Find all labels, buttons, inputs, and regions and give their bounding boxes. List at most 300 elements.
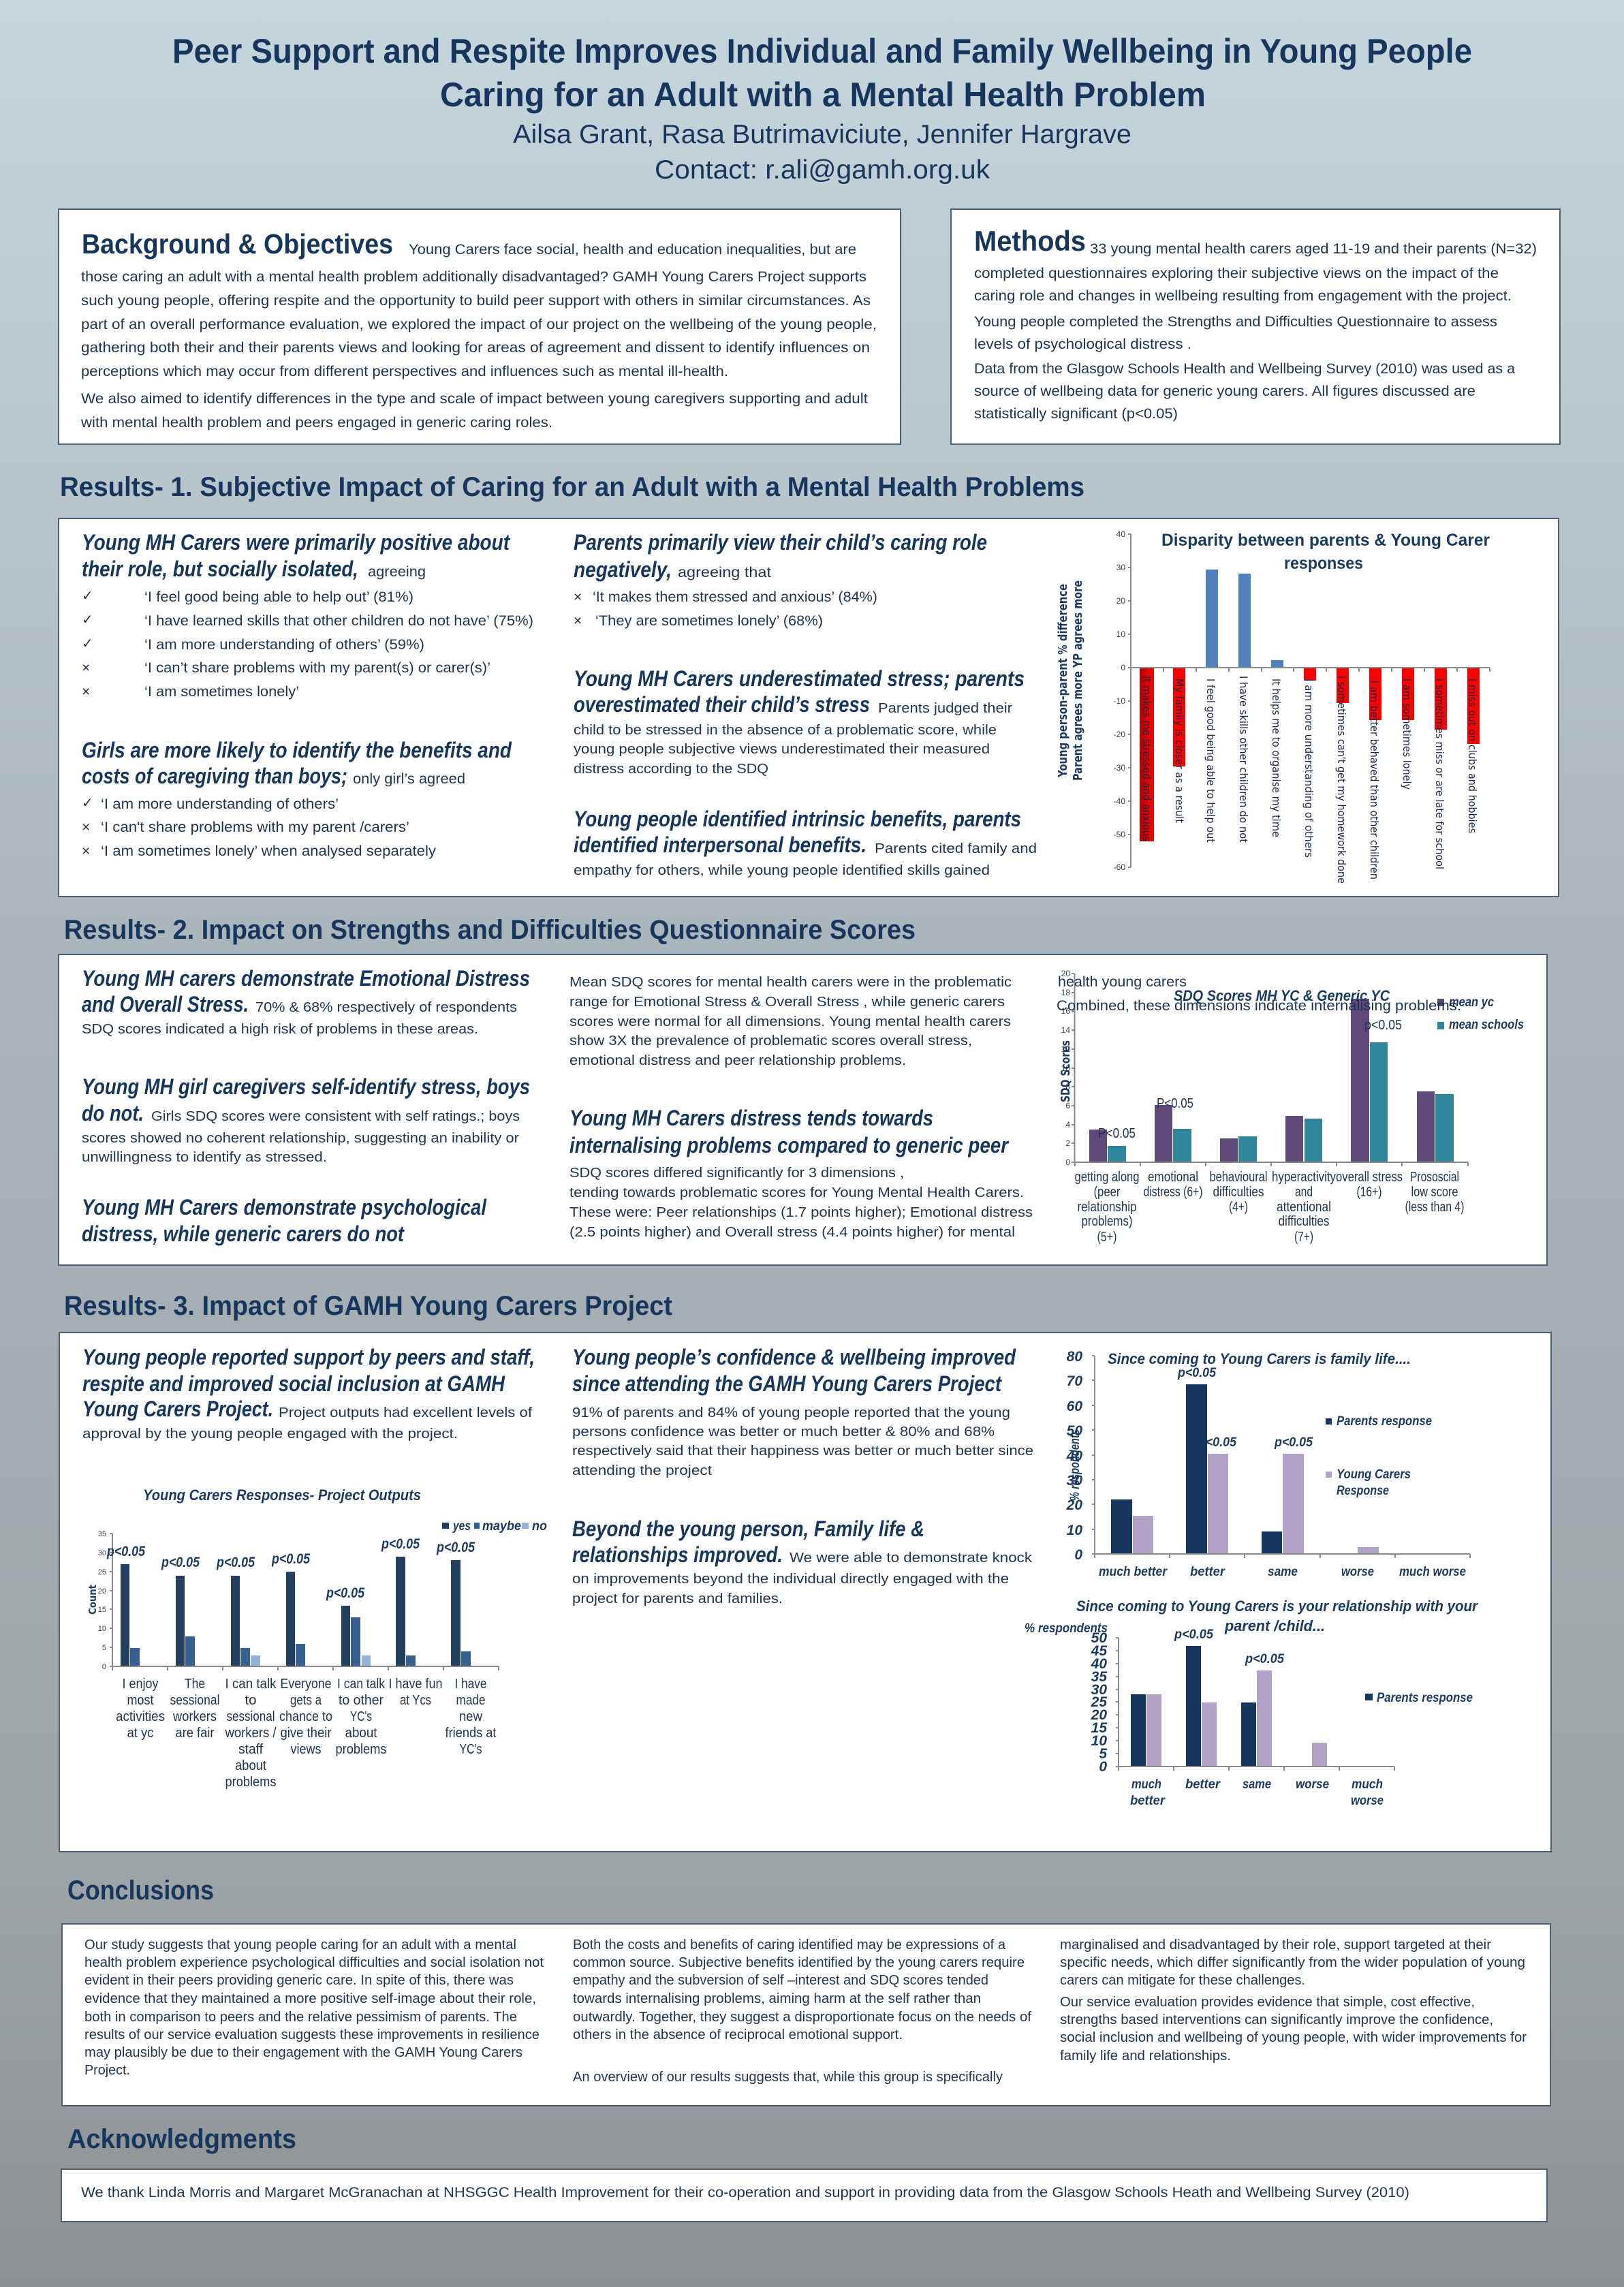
text block: underestimated stress: Young MH Carers underestimated stress; parents <box>574 666 1025 691</box>
y axis title: Young person-parent % difference <box>1056 584 1070 778</box>
text block: emotional distress: SDQ scores indicated a high risk of problems in these areas. <box>82 1022 478 1037</box>
legend <box>442 1519 547 1534</box>
authors and contact: Ailsa Grant, Rasa Butrimaviciute, Jennifer Hargrave <box>513 120 1131 149</box>
text block: mean SDQ scores: Mean SDQ scores for mental health carers were in the problematic <box>569 975 1012 990</box>
significance labels: p<0.05 <box>1364 1018 1402 1033</box>
text block: methods: completed questionnaires exploring their subjective views on the impact of the <box>974 266 1499 281</box>
text block: girls benefits and costs <box>82 738 512 859</box>
text block: methods: caring role and changes in wellbeing resulting from engagement with the project. <box>974 288 1512 304</box>
text block: background: gathering both their and their parents views and looking for areas of agreement and dissent to identify influences on <box>81 340 870 356</box>
text block: positive about role: Young MH Carers were primarily positive about <box>82 530 510 555</box>
text block: psychological distress <box>82 1195 487 1246</box>
y axis tick labels: 20 <box>1061 969 1070 978</box>
title: Caring for an Adult with a Mental Health Problem <box>440 76 1206 114</box>
rotated category labels: I sometimes miss or are late for school <box>1433 679 1446 869</box>
panel: background and objectives <box>59 209 901 444</box>
text block: conclusions column 2: common source. Subjective benefits identified by the young carers require <box>573 1955 1025 1970</box>
category labels: views <box>290 1742 322 1757</box>
rotated category labels: I am sometimes lonely <box>1401 679 1414 790</box>
text block: support by peers and staff: respite and improved social inclusion at GAMH <box>82 1371 505 1396</box>
category labels: emotional <box>1148 1170 1198 1185</box>
text block: background: part of an overall performance evaluation, we explored the impact of our project on the wellbeing of the young people, <box>81 317 877 332</box>
panel: methods <box>951 209 1560 444</box>
text block: positive about role: ✓ <box>82 611 93 627</box>
text block: family life and relationships: on improvements beyond the individual directly engaged with the <box>572 1572 1009 1587</box>
y axis tick labels <box>98 1530 106 1671</box>
y axis tick labels: 4 <box>1065 1120 1070 1130</box>
text block: mean SDQ scores: show 3X the prevalence of problematic scores overall stress, <box>569 1033 972 1048</box>
category labels: (less than 4) <box>1405 1200 1465 1215</box>
legend: Parents response <box>1377 1691 1473 1705</box>
text block: conclusions column 2: towards internalising problems, aiming harm at the self rather than <box>573 1991 981 2006</box>
rotated category labels: It helps me to organise my time <box>1270 679 1283 837</box>
text block: positive about role: ‘I feel good being able to help out’ (81%) <box>144 589 413 605</box>
significance labels: p<0.05 <box>271 1551 310 1567</box>
text block: internalising problems: internalising problems compared to generic peer <box>569 1133 1009 1157</box>
text block: methods: levels of psychological distress . <box>974 337 1191 352</box>
significance labels: P<0.05 <box>1157 1096 1193 1111</box>
y axis tick labels: 30 <box>1116 563 1125 572</box>
text block: methods <box>974 241 1537 422</box>
text block: confidence and wellbeing: 91% of parents and 84% of young people reported that the young <box>572 1405 1010 1420</box>
y axis tick labels: 80 <box>1067 1349 1082 1365</box>
chart title: Young Carers Responses- Project Outputs <box>143 1487 421 1504</box>
category labels: getting along <box>1075 1170 1139 1185</box>
bars <box>1140 570 1480 841</box>
text block: girl caregivers: do not. <box>82 1101 144 1125</box>
y axis tick labels: -40 <box>1114 796 1125 806</box>
chart title: parent /child... <box>1224 1617 1325 1634</box>
category labels: much better <box>1099 1565 1168 1579</box>
category labels: better <box>1130 1794 1166 1808</box>
category labels: relationship <box>1078 1200 1136 1215</box>
category labels: I can talk <box>337 1677 386 1692</box>
text block: conclusions column 2: empathy and the subversion of self –interest and SDQ scores tended <box>573 1973 988 1988</box>
category labels: I have fun <box>388 1677 443 1692</box>
y axis tick labels: 12 <box>1061 1044 1070 1054</box>
bar chart: disparity between parents and young carers <box>1056 529 1490 884</box>
category labels: The <box>185 1677 205 1692</box>
y axis title: Count <box>87 1585 99 1615</box>
category labels: better <box>1190 1565 1226 1579</box>
text block: parents view negatively: ‘They are sometimes lonely’ (68%) <box>595 613 823 629</box>
text block: intrinsic benefits: Young people identified intrinsic benefits, parents <box>574 807 1021 831</box>
text block: background: with mental health problem and peers engaged in generic caring roles. <box>80 415 552 431</box>
title <box>172 32 1472 114</box>
text block: positive about role <box>82 530 533 700</box>
category labels: made <box>456 1693 485 1708</box>
text block: methods: source of wellbeing data for generic young carers. All figures discussed are <box>974 384 1475 399</box>
text block: emotional distress: 70% & 68% respectively of respondents <box>255 1000 517 1015</box>
text block: conclusions column 1: both in comparison to peers and the relative pessimism of parents. The <box>84 2010 517 2025</box>
text block: family life and relationships: project for parents and families. <box>572 1591 783 1606</box>
text block: conclusions column 2: outwardly. Together, they suggest a disproportionate focus on the needs of <box>573 2010 1031 2025</box>
chart title: responses <box>1284 554 1363 573</box>
text block: support by peers and staff: Project outputs had excellent levels of <box>279 1405 532 1420</box>
y axis tick labels <box>1114 529 1125 872</box>
y axis tick labels <box>1091 1630 1107 1775</box>
text block: confidence and wellbeing: since attending the GAMH Young Carers Project <box>572 1371 1002 1396</box>
category labels: problems) <box>1082 1214 1132 1229</box>
y axis tick labels: -20 <box>1114 730 1125 739</box>
significance labels: p<0.05 <box>1198 1435 1236 1450</box>
text block: girl caregivers: scores showed no coherent relationship, suggesting an inability or <box>82 1131 519 1146</box>
heading: results 2: Results- 2. Impact on Strengths and Difficulties Questionnaire Scores <box>64 915 916 945</box>
text block: methods: 33 young mental health carers aged 11-19 and their parents (N=32) <box>1090 241 1537 257</box>
category labels: activities <box>116 1709 165 1724</box>
text block: conclusions column 1: evident in their peers providing generic care. In spite of this, there was <box>84 1973 514 1988</box>
y axis tick labels: 35 <box>1091 1669 1107 1685</box>
significance labels <box>1174 1628 1284 1666</box>
heading: background and objectives: Background & Objectives <box>82 228 393 260</box>
category labels: attentional <box>1277 1200 1331 1215</box>
text block: support by peers and staff: approval by the young people engaged with the project. <box>82 1427 458 1442</box>
text block: positive about role: ‘I am sometimes lonely’ <box>144 684 299 700</box>
y axis tick labels: 25 <box>98 1568 106 1576</box>
text block: girls benefits and costs: costs of caregiving than boys; <box>82 764 347 788</box>
significance labels: p<0.05 <box>1177 1366 1216 1380</box>
y axis tick labels: 20 <box>98 1587 106 1596</box>
text block: girls benefits and costs: Girls are more likely to identify the benefits and <box>82 738 512 762</box>
y axis tick labels: -30 <box>1114 763 1125 773</box>
category labels: most <box>127 1693 154 1708</box>
category labels: YC's <box>459 1742 482 1757</box>
category labels: worse <box>1296 1777 1329 1792</box>
text block: conclusions column 3: social inclusion and wellbeing of young people, with wider improvements for <box>1060 2030 1527 2045</box>
bars <box>121 1557 471 1666</box>
text block: internalising problems: SDQ scores differed significantly for 3 dimensions , <box>569 1166 904 1181</box>
text block: confidence and wellbeing: attending the project <box>572 1463 712 1478</box>
rotated category labels: I miss out on clubs and hobbies <box>1466 679 1479 833</box>
text block: internalising problems <box>569 1106 1033 1240</box>
text block: background: those caring an adult with a mental health problem additionally disadvantaged? GAMH Young Carers Project supports <box>81 269 866 285</box>
rotated category labels: I am more understanding of others <box>1302 679 1315 858</box>
category labels: are fair <box>176 1726 215 1741</box>
y axis tick labels: 15 <box>1091 1720 1107 1736</box>
category labels: distress (6+) <box>1143 1185 1203 1200</box>
category labels: I can talk <box>225 1677 277 1692</box>
y axis tick labels: 16 <box>1061 1006 1070 1016</box>
category labels: sessional <box>226 1709 275 1724</box>
category labels: new <box>459 1709 483 1724</box>
text block: conclusions column 1 <box>84 1938 544 2078</box>
text block: confidence and wellbeing: Young people’s confidence & wellbeing improved <box>572 1345 1016 1369</box>
text block: girl caregivers: Young MH girl caregivers self-identify stress, boys <box>82 1074 530 1099</box>
text block: internalising problems: Young MH Carers distress tends towards <box>569 1106 933 1130</box>
text block: mean SDQ scores <box>569 975 1012 1068</box>
rotated category labels: I feel good being able to help out <box>1204 679 1217 843</box>
legend: mean schools <box>1449 1018 1524 1032</box>
text block: conclusions column 2 <box>573 1938 1031 2085</box>
category labels: low score <box>1411 1185 1458 1200</box>
bar chart: project outputs <box>87 1487 547 1790</box>
chart title <box>1076 1598 1478 1634</box>
text block: girl caregivers: unwillingness to identify as stressed. <box>82 1150 327 1165</box>
legend: Parents response <box>1337 1414 1432 1429</box>
y axis tick labels: 40 <box>1066 1448 1082 1464</box>
text block: girls benefits and costs: × <box>82 843 90 859</box>
legend <box>1326 1414 1432 1498</box>
text block: girls benefits and costs: ‘I am sometimes lonely’ when analysed separately <box>101 843 437 859</box>
text block: intrinsic benefits: identified interpersonal benefits. <box>574 833 866 857</box>
text block: methods: Young people completed the Strengths and Difficulties Questionnaire to assess <box>974 314 1497 330</box>
y axis tick labels: 35 <box>98 1530 106 1538</box>
text block: underestimated stress: Parents judged their <box>878 701 1012 716</box>
text block: underestimated stress: child to be stressed in the absence of a problematic score, while <box>574 723 997 738</box>
bars <box>1089 999 1454 1162</box>
y axis tick labels <box>1061 969 1070 1167</box>
category labels: at Ycs <box>400 1693 431 1708</box>
category labels <box>1099 1565 1466 1579</box>
text block: underestimated stress: distress according to the SDQ <box>574 762 768 777</box>
text block: support by peers and staff: Young Carers Project. <box>82 1397 273 1421</box>
significance labels: p<0.05 <box>216 1555 255 1570</box>
significance labels <box>1177 1366 1313 1450</box>
overflow text: Combined, these dimensions indicate internalising problems. <box>1057 998 1461 1014</box>
text block: conclusions column 2: others in the absence of reciprocal emotional support. <box>573 2027 903 2042</box>
text block: conclusions column 3: marginalised and disadvantaged by their role, support targeted at their <box>1060 1938 1491 1952</box>
y axis title: % respondents <box>1025 1621 1108 1636</box>
y axis tick labels: -50 <box>1114 830 1125 839</box>
text block: conclusions column 1: health problem experience psychological difficulties and social isolation not <box>84 1955 544 1970</box>
y axis tick labels: 10 <box>1116 629 1125 639</box>
category labels: and <box>1295 1185 1313 1200</box>
y axis tick labels: 25 <box>1091 1694 1107 1710</box>
legend: Young Carers <box>1337 1467 1411 1482</box>
panel: results 1 <box>59 518 1559 897</box>
text block: methods: statistically significant (p<0.05) <box>974 406 1178 422</box>
category labels: to other <box>339 1693 384 1708</box>
text block: conclusions column 3: specific needs, which differ significantly from the wider population of young <box>1060 1955 1525 1970</box>
y axis tick labels: 0 <box>1074 1547 1082 1563</box>
text block: internalising problems: (2.5 points higher) and Overall stress (4.4 points higher) for mental <box>569 1225 1015 1240</box>
text block: family life and relationships: relationships improved. <box>572 1542 783 1567</box>
text block: mean SDQ scores: scores were normal for all dimensions. Young mental health carers <box>569 1014 1011 1029</box>
panel: acknowledgments <box>61 2169 1547 2222</box>
text block: parents view negatively: negatively, <box>574 557 672 582</box>
text block: confidence and wellbeing <box>572 1345 1033 1478</box>
rotated category labels: My family is closer as a result <box>1173 679 1186 823</box>
text block: conclusions column 3 <box>1060 1938 1527 2064</box>
text block: underestimated stress <box>574 666 1025 777</box>
text block: conclusions column 2: Both the costs and benefits of caring identified may be expressions of a <box>573 1938 1006 1952</box>
text block: confidence and wellbeing: persons confidence was better or much better & 80% and 68% <box>572 1425 995 1440</box>
text block: methods: Data from the Glasgow Schools Health and Wellbeing Survey (2010) was used as a <box>974 361 1515 377</box>
category labels: chance to <box>279 1709 332 1724</box>
text block: intrinsic benefits: empathy for others, while young people identified skills gained <box>574 863 990 878</box>
y axis tick labels: 10 <box>1067 1523 1082 1538</box>
heading: results 3: Results- 3. Impact of GAMH Young Carers Project <box>64 1291 672 1321</box>
y axis tick labels <box>1066 1349 1082 1563</box>
text block: psychological distress: distress, while generic carers do not <box>82 1222 405 1246</box>
bars <box>1131 1646 1327 1766</box>
y axis tick labels: 5 <box>102 1644 106 1652</box>
y axis tick labels: 40 <box>1116 529 1125 539</box>
text block: girl caregivers <box>82 1074 530 1165</box>
y axis tick labels: -60 <box>1114 862 1125 872</box>
category labels: sessional <box>170 1693 219 1708</box>
category labels: problems <box>335 1742 387 1757</box>
category labels: give their <box>281 1726 332 1741</box>
category labels <box>116 1677 497 1790</box>
y axis title <box>1056 580 1085 781</box>
category labels: workers <box>172 1709 217 1724</box>
panel: conclusions <box>62 1924 1550 2106</box>
y axis title: Parent agrees more YP agrees more <box>1071 580 1085 781</box>
significance labels: p<0.05 <box>161 1555 200 1570</box>
text block: underestimated stress: overestimated their child’s stress <box>574 692 870 717</box>
title: Peer Support and Respite Improves Individual and Family Wellbeing in Young People <box>172 32 1472 70</box>
text block: family life and relationships: Beyond the young person, Family life & <box>572 1516 924 1541</box>
panel: results 2 <box>59 954 1547 1265</box>
y axis tick labels: 8 <box>1065 1082 1070 1091</box>
category labels: about <box>345 1726 377 1741</box>
bar chart: relationship with parent or child <box>1025 1598 1478 1808</box>
text block: conclusions column 2: An overview of our results suggests that, while this group is specifically <box>573 2070 1003 2085</box>
category labels: much <box>1131 1777 1161 1792</box>
category labels: YC's <box>350 1709 372 1724</box>
y axis title: SDQ Scores <box>1059 1040 1073 1102</box>
y axis tick labels: 10 <box>98 1625 106 1633</box>
chart title: SDQ Scores MH YC & Generic YC <box>1174 987 1390 1004</box>
significance labels <box>1098 1018 1402 1141</box>
significance labels <box>106 1536 475 1601</box>
text block: girls benefits and costs: only girl’s agreed <box>353 771 465 787</box>
y axis tick labels: 45 <box>1091 1643 1107 1659</box>
chart title: Disparity between parents & Young Carer <box>1161 531 1490 550</box>
category labels: (16+) <box>1357 1185 1381 1200</box>
y axis tick labels: 30 <box>1067 1473 1082 1489</box>
text block: conclusions column 3: strengths based interventions can significantly improve the confidence, <box>1060 2012 1493 2027</box>
category labels: gets a <box>290 1693 322 1708</box>
rotated category labels: I sometimes can't get my homework done <box>1335 676 1348 884</box>
y axis tick labels: 5 <box>1099 1746 1107 1762</box>
category labels <box>1130 1777 1384 1808</box>
text block: background <box>80 242 877 431</box>
category labels: hyperactivity <box>1272 1170 1336 1185</box>
authors and contact: Contact: r.ali@gamh.org.uk <box>655 155 990 185</box>
text block: parents view negatively: ‘It makes them stressed and anxious’ (84%) <box>593 589 877 605</box>
category labels: workers / <box>225 1726 277 1741</box>
text block: support by peers and staff <box>82 1345 535 1442</box>
overflow text <box>1057 974 1461 1014</box>
text block: positive about role: ‘I can’t share problems with my parent(s) or carer(s)’ <box>144 660 490 676</box>
rotated category labels: I have skills other children do not <box>1237 676 1250 843</box>
text block: internalising problems: tending towards problematic scores for Young Mental Health Carers. <box>569 1185 1024 1200</box>
bar chart: SDQ scores <box>1057 969 1524 1245</box>
bars <box>1111 1384 1379 1553</box>
y axis tick labels: 0 <box>1099 1759 1107 1775</box>
y axis tick labels: 10 <box>1091 1733 1107 1749</box>
text block: background: Young Carers face social, health and education inequalities, but are <box>409 242 856 258</box>
y axis tick labels: 0 <box>102 1663 106 1671</box>
text block: mean SDQ scores: emotional distress and peer relationship problems. <box>569 1053 906 1068</box>
text block: internalising problems: These were: Peer relationships (1.7 points higher); Emotional distress <box>569 1205 1033 1220</box>
y axis title: % respondents <box>1068 1429 1082 1501</box>
text block: background: perceptions which may occur from different perspectives and influences such as mental ill-health. <box>81 364 728 379</box>
category labels: I have <box>455 1677 486 1692</box>
text block: positive about role: agreeing <box>368 564 426 580</box>
text block: positive about role: × <box>82 684 90 700</box>
category labels: same <box>1243 1777 1271 1792</box>
rotated category labels: I am better behaved than other children <box>1368 681 1381 880</box>
category labels: (peer <box>1094 1185 1121 1200</box>
legend: no <box>532 1519 547 1534</box>
text block: girls benefits and costs: ‘I am more understanding of others’ <box>101 796 339 812</box>
heading: conclusions: Conclusions <box>67 1876 214 1905</box>
category labels: about <box>235 1758 266 1773</box>
y axis tick labels: 40 <box>1091 1656 1107 1672</box>
y axis tick labels: 15 <box>98 1606 106 1614</box>
category labels: same <box>1268 1565 1298 1579</box>
rotated category labels: It makes me stressed and anxious <box>1140 676 1153 841</box>
text block: emotional distress <box>82 966 530 1037</box>
significance labels: p<0.05 <box>326 1585 364 1601</box>
category labels: much <box>1352 1777 1383 1792</box>
category labels: overall stress <box>1336 1170 1403 1185</box>
significance labels: P<0.05 <box>1098 1126 1136 1141</box>
text block: conclusions column 3: Our service evaluation provides evidence that simple, cost effective, <box>1060 1995 1475 2010</box>
text block: family life and relationships <box>572 1516 1033 1606</box>
y axis tick labels: 10 <box>1061 1063 1070 1073</box>
text block: intrinsic benefits: Parents cited family and <box>875 841 1037 856</box>
legend: yes <box>452 1519 471 1534</box>
y axis tick labels: 50 <box>1091 1630 1107 1646</box>
y axis tick labels: 70 <box>1067 1373 1082 1389</box>
heading: acknowledgments: Acknowledgments <box>67 2124 296 2154</box>
category labels: to <box>245 1693 256 1708</box>
y axis tick labels: 60 <box>1067 1399 1082 1414</box>
text block: background: such young people, offering respite and the opportunity to build peer support with others in similar circumstances. As <box>81 293 871 309</box>
text block: family life and relationships: We were able to demonstrate knock <box>790 1551 1033 1566</box>
text block: emotional distress: and Overall Stress. <box>82 992 249 1016</box>
y axis tick labels: 18 <box>1061 988 1070 997</box>
chart title: Since coming to Young Carers is your relationship with your <box>1076 1598 1478 1615</box>
legend: Response <box>1337 1484 1389 1498</box>
text block: underestimated stress: young people subjective views underestimated their measured <box>574 742 990 757</box>
text block: parents view negatively: × <box>574 589 582 605</box>
y axis tick labels: -10 <box>1114 696 1125 706</box>
legend: mean yc <box>1449 995 1494 1010</box>
rotated category labels <box>1140 676 1479 884</box>
text block: positive about role: ✓ <box>82 635 93 651</box>
text block: parents view negatively: Parents primarily view their child’s caring role <box>574 530 987 555</box>
y axis tick labels: 2 <box>1065 1138 1070 1148</box>
category labels: Everyone <box>281 1677 331 1692</box>
y axis tick labels: 20 <box>1116 596 1125 606</box>
category labels: I enjoy <box>123 1677 158 1692</box>
category labels: (5+) <box>1097 1230 1117 1245</box>
significance labels: p<0.05 <box>1174 1628 1213 1642</box>
chart title <box>1161 531 1490 573</box>
y axis tick labels: 20 <box>1066 1497 1082 1513</box>
text block: acknowledgments: We thank Linda Morris and Margaret McGranachan at NHSGGC Health Improvement for their co-operation and support in providing data from the Glasgow Schools Heath and Wellbeing Survey (2010) <box>81 2185 1409 2200</box>
text block: parents view negatively <box>574 530 987 629</box>
y axis tick labels: 0 <box>1121 663 1125 672</box>
category labels: friends at <box>446 1726 497 1741</box>
text block: parents view negatively: agreeing that <box>678 565 771 580</box>
category labels: better <box>1185 1777 1221 1792</box>
overflow text: health young carers <box>1058 974 1187 990</box>
text block: intrinsic benefits <box>574 807 1037 878</box>
legend <box>1437 995 1524 1032</box>
text block: positive about role: ‘I have learned skills that other children do not have’ (75%) <box>144 613 533 629</box>
category labels <box>1075 1170 1465 1245</box>
category labels: worse <box>1351 1794 1384 1808</box>
text block: positive about role: × <box>82 660 90 676</box>
category labels: behavioural <box>1210 1170 1267 1185</box>
y axis tick labels: 20 <box>1091 1707 1107 1723</box>
